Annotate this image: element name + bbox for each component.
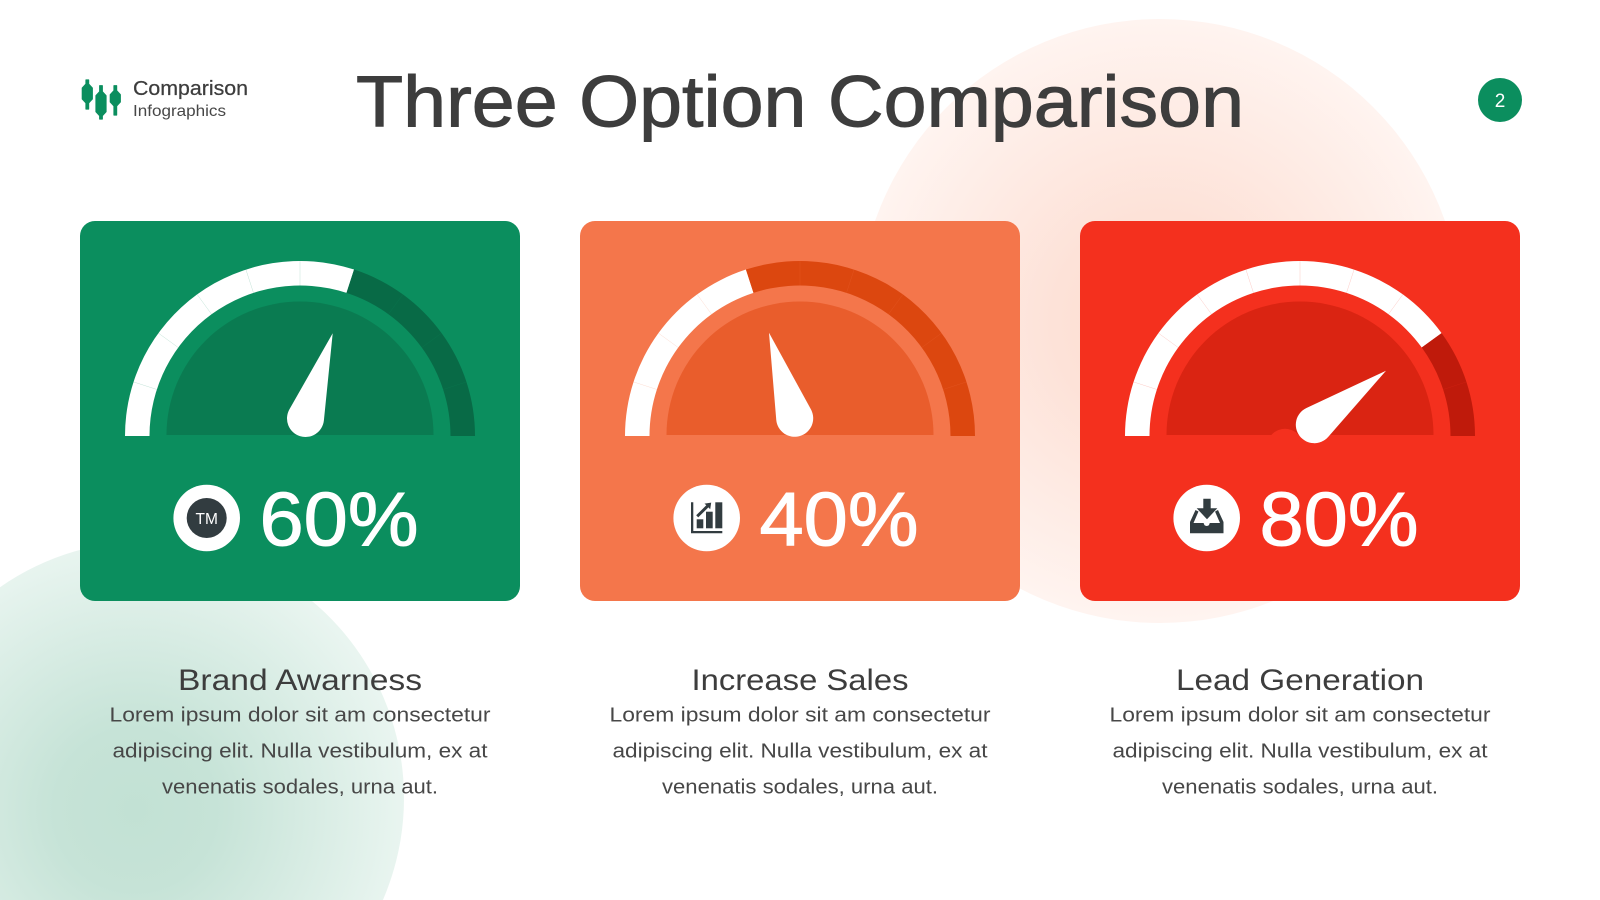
description: venenatis sodales, urna aut. <box>162 776 438 798</box>
gauge remaining arc <box>1422 333 1475 436</box>
logo <box>82 78 248 120</box>
gauge 80 percent <box>1125 261 1475 465</box>
panel: increase sales card <box>580 221 1020 601</box>
value 40%: 40% <box>760 478 918 563</box>
description <box>610 705 991 798</box>
title: Three Option Comparison <box>356 63 1244 143</box>
icon: bar chart <box>673 485 740 551</box>
description: Lorem ipsum dolor sit am consectetur <box>110 705 491 727</box>
text block: lead generation <box>1110 664 1491 798</box>
description: venenatis sodales, urna aut. <box>662 776 938 798</box>
gauge remaining arc <box>347 270 475 436</box>
icon: candlesticks <box>82 80 120 119</box>
background circle: pink <box>858 19 1462 623</box>
dial notch <box>1267 429 1303 465</box>
logo text: Comparison <box>133 78 248 100</box>
heading: Brand Awarness <box>178 664 422 697</box>
description: venenatis sodales, urna aut. <box>1162 776 1438 798</box>
gauge 60 percent <box>125 261 475 436</box>
description: adipiscing elit. Nulla vestibulum, ex at <box>1112 740 1488 762</box>
description <box>110 705 491 798</box>
description: Lorem ipsum dolor sit am consectetur <box>1110 705 1491 727</box>
description: Lorem ipsum dolor sit am consectetur <box>610 705 991 727</box>
background circle: green <box>0 541 404 900</box>
inner dial <box>666 302 934 435</box>
value 80%: 80% <box>1260 478 1418 563</box>
gauge white arc <box>1125 261 1442 436</box>
gauge needle <box>769 333 813 437</box>
gauge 40 percent <box>625 261 975 436</box>
gauge white arc <box>125 261 354 436</box>
icon: trademark: TM <box>196 511 218 528</box>
text block: increase sales <box>610 664 991 798</box>
text block: brand awareness <box>110 664 491 798</box>
icon: inbox download <box>1173 485 1240 551</box>
gauge needle <box>287 333 333 437</box>
panel: lead generation card <box>1080 221 1520 601</box>
inner dial <box>1166 302 1434 435</box>
gauge needle <box>1296 371 1386 443</box>
value 60%: 60% <box>260 478 418 563</box>
page number badge <box>1478 78 1522 122</box>
gauge remaining arc <box>746 261 975 436</box>
inner dial <box>166 302 434 435</box>
heading: Lead Generation <box>1176 664 1424 697</box>
icon: trademark <box>173 485 240 551</box>
gauge white arc <box>625 270 753 436</box>
page number badge: 2 <box>1495 91 1505 112</box>
description: adipiscing elit. Nulla vestibulum, ex at <box>112 740 488 762</box>
heading: Increase Sales <box>692 664 908 697</box>
panel: brand awareness card <box>80 221 520 601</box>
description: adipiscing elit. Nulla vestibulum, ex at <box>612 740 988 762</box>
description <box>1110 705 1491 798</box>
logo subtext: Infographics <box>133 103 226 120</box>
